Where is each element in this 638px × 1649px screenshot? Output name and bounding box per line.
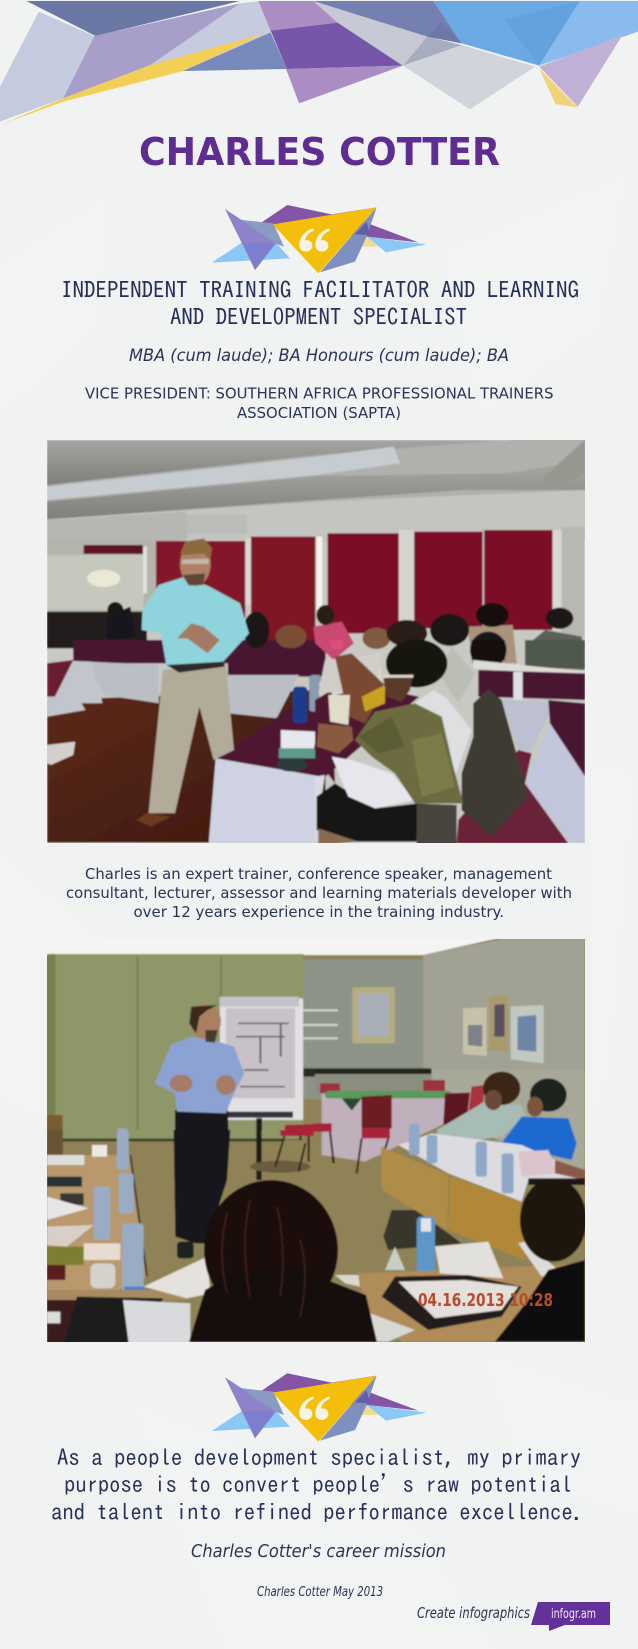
icon: quote badge bottom xyxy=(212,1373,427,1442)
photo date stamp: 04.16.2013 10:28 xyxy=(418,1290,553,1311)
photo: Charles at flipchart in conference room xyxy=(41,937,594,1347)
badge: infogr.am: infogr.am xyxy=(551,1607,596,1622)
vice president text: ASSOCIATION (SAPTA) xyxy=(237,404,401,422)
quote text: and talent into refined performance excellence. xyxy=(51,1500,584,1523)
body text: about Charles: over 12 years experience in the training industry. xyxy=(134,903,504,921)
badge: infogr.am xyxy=(531,1602,610,1631)
date credit: Charles Cotter May 2013 xyxy=(257,1585,383,1600)
banner: geometric polygons xyxy=(0,1,638,125)
heading: role: INDEPENDENT TRAINING FACILITATOR AND LEARNING xyxy=(61,278,579,301)
photo: Charles presenting in room with red curtains xyxy=(47,433,587,845)
icon: quote badge top xyxy=(212,205,427,273)
vice president text xyxy=(85,384,554,422)
body text: about Charles: consultant, lecturer, assessor and learning materials developer with xyxy=(66,884,572,902)
quote attribution: Charles Cotter's career mission xyxy=(191,1541,446,1562)
quote text: As a people development specialist, my primary xyxy=(57,1446,581,1468)
title: CHARLES COTTER xyxy=(139,130,500,174)
footer: create infographics: Create infographics xyxy=(417,1604,530,1622)
quote text: purpose is to convert people’s raw potential xyxy=(64,1472,572,1496)
heading: role xyxy=(61,278,579,328)
quote text xyxy=(51,1446,584,1523)
vice president text: VICE PRESIDENT: SOUTHERN AFRICA PROFESSIONAL TRAINERS xyxy=(85,384,554,402)
body text: about Charles: Charles is an expert trainer, conference speaker, management xyxy=(85,865,552,883)
body text: about Charles xyxy=(66,865,572,921)
qualifications: MBA (cum laude); BA Honours (cum laude); BA xyxy=(129,346,509,366)
heading: role: AND DEVELOPMENT SPECIALIST xyxy=(170,305,467,328)
